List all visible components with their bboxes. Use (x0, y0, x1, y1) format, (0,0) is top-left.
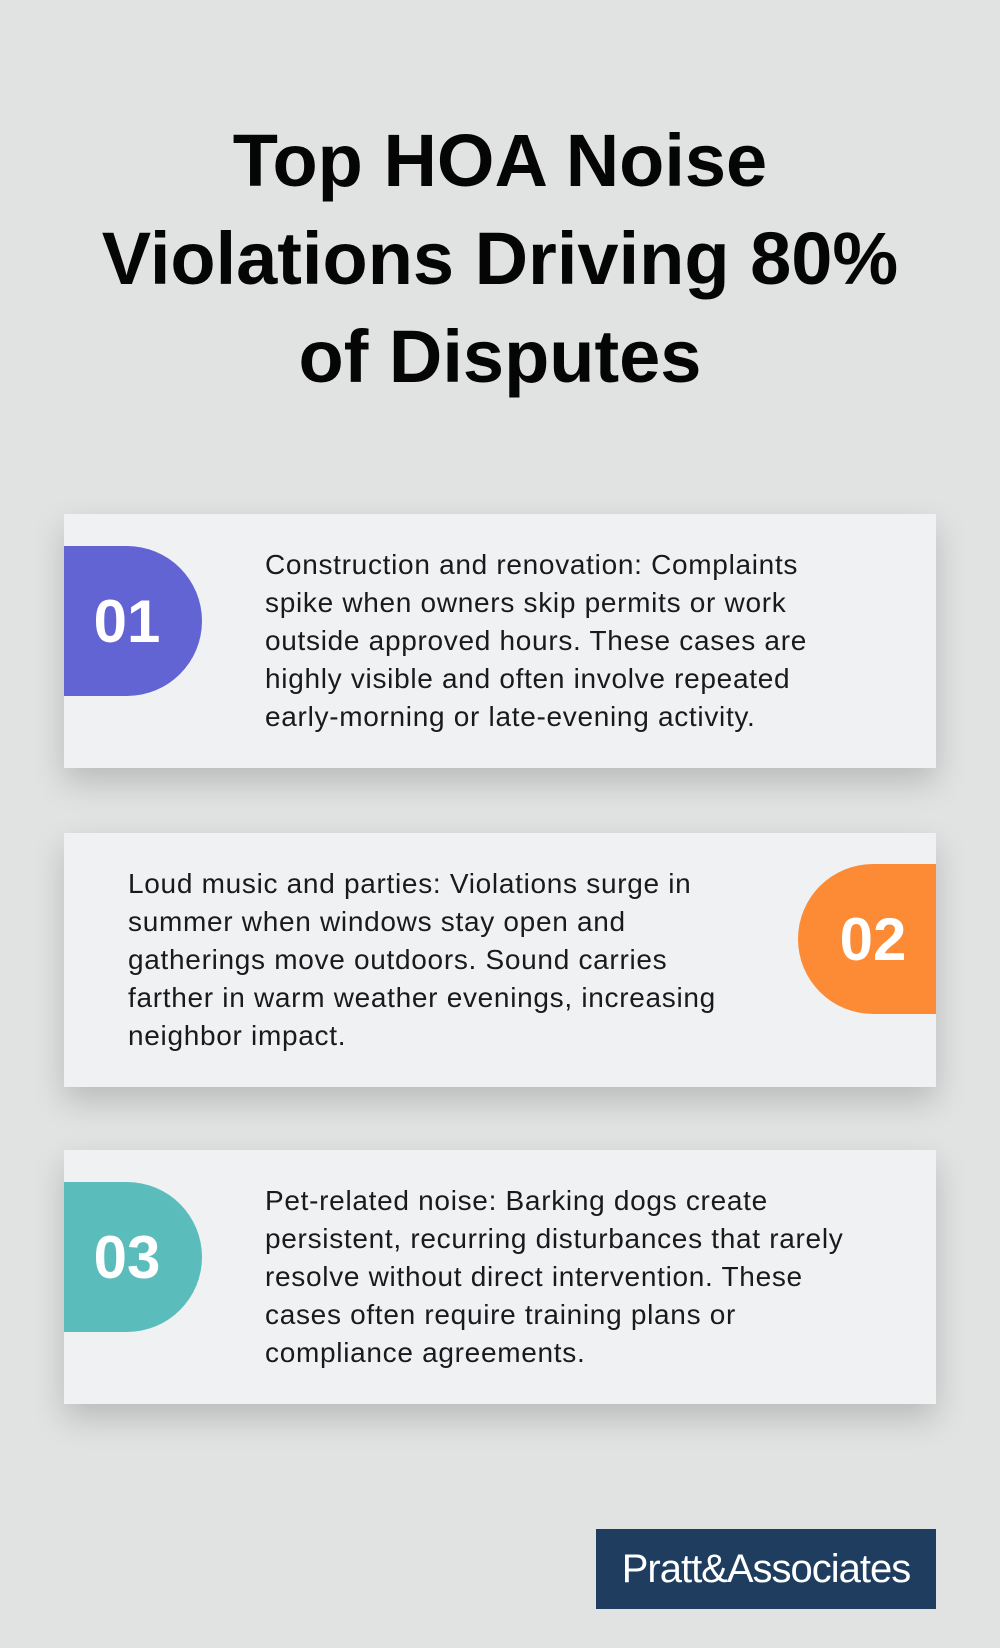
badge 02: 02 (840, 906, 906, 972)
text 3: compliance agreements. (265, 1337, 585, 1368)
text 2: gatherings move outdoors. Sound carries (128, 944, 667, 975)
text 1: spike when owners skip permits or work (265, 587, 786, 618)
text 1: Construction and renovation: Complaints (265, 549, 798, 580)
text 2: neighbor impact. (128, 1020, 346, 1051)
title (102, 119, 898, 398)
title: Top HOA Noise (233, 119, 767, 202)
panel: card 3 (64, 1150, 936, 1404)
title: Violations Driving 80% (102, 217, 898, 300)
title: of Disputes (299, 315, 701, 398)
text 2: summer when windows stay open and (128, 906, 626, 937)
badge 03: 03 (94, 1224, 160, 1290)
badge 03 (64, 1182, 202, 1332)
text 2 (128, 868, 716, 1051)
panel: card 2 (64, 833, 936, 1087)
logo: Pratt&Associates (622, 1546, 910, 1590)
text 1: outside approved hours. These cases are (265, 625, 807, 656)
text 2: Loud music and parties: Violations surge in (128, 868, 691, 899)
text 1: highly visible and often involve repeated (265, 663, 790, 694)
text 3: resolve without direct intervention. These (265, 1261, 803, 1292)
logo (596, 1529, 936, 1609)
text 3 (265, 1185, 843, 1368)
panel: card 1 (64, 514, 936, 768)
text 1: early-morning or late-evening activity. (265, 701, 756, 732)
text 3: cases often require training plans or (265, 1299, 736, 1330)
badge 01 (64, 546, 202, 696)
text 2: farther in warm weather evenings, increasing (128, 982, 716, 1013)
text 1 (265, 549, 807, 732)
badge 01: 01 (94, 588, 160, 654)
text 3: persistent, recurring disturbances that rarely (265, 1223, 843, 1254)
badge 02 (798, 864, 936, 1014)
text 3: Pet-related noise: Barking dogs create (265, 1185, 768, 1216)
